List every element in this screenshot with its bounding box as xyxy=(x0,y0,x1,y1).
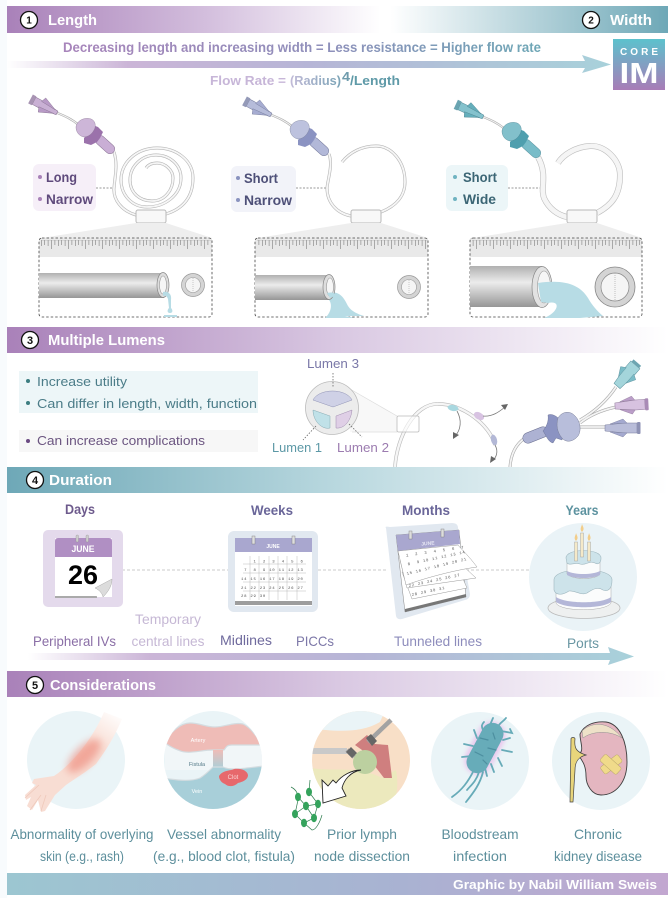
label: months: Months xyxy=(402,502,450,518)
icon: week calendar: JUNE xyxy=(266,544,280,550)
badge 4: 4 xyxy=(32,475,39,487)
caption: bloodstream infection: infection xyxy=(453,848,507,864)
icon: week calendar: 1 2 3 4 5 6 xyxy=(241,560,304,564)
icon: hub and connector xyxy=(241,94,324,151)
curled pages: 22 23 24 25 26 27 xyxy=(409,574,461,589)
icon: clamp xyxy=(136,210,166,223)
curled pages: 8 9 10 11 12 13 14 xyxy=(405,551,466,568)
icon: birthday cake xyxy=(529,523,637,631)
caption: vessel abnormality: (e.g., blood clot, fistula) xyxy=(153,848,295,864)
caption: vessel abnormality xyxy=(153,826,295,864)
label: lumen 1: Lumen 1 xyxy=(272,440,322,455)
flow rate formula: 4 xyxy=(342,69,351,84)
badge 4 xyxy=(26,472,44,488)
badge 3: 3 xyxy=(27,335,33,347)
labels: line types xyxy=(33,611,599,651)
heading: width: Width xyxy=(610,13,652,29)
arrows: lumen exits xyxy=(455,407,505,461)
icon: clamp xyxy=(567,210,597,223)
icon: wide loop tube xyxy=(538,146,620,217)
detail: zoom wedge xyxy=(473,223,642,238)
label: lumen 2: Lumen 2 xyxy=(337,440,389,455)
logo: CORE IM xyxy=(613,39,665,90)
curled pages xyxy=(398,545,477,599)
tiny labels: Clot xyxy=(228,775,239,781)
tiny labels: Artery xyxy=(191,738,206,744)
banner: length and width xyxy=(7,6,668,33)
icon: triple lumen hub xyxy=(510,356,649,467)
icon: hub and connector xyxy=(452,97,536,153)
footer credit xyxy=(7,873,668,895)
caption: lymph node dissection: node dissection xyxy=(314,848,410,864)
detail: zoom wedge xyxy=(258,223,428,238)
flow rate formula: Flow Rate = xyxy=(210,73,286,88)
icon: week calendar: 7 8 9 10 11 12 13 xyxy=(241,569,304,573)
detail: zoom wedge xyxy=(42,223,212,238)
callout: short wide: Short xyxy=(463,169,497,185)
label: years: Years xyxy=(566,502,599,518)
callout: long narrow: Long xyxy=(46,169,77,185)
label: temporary central lines xyxy=(132,611,204,649)
caption: bloodstream infection: Bloodstream xyxy=(442,826,518,842)
label: temporary central lines: central lines xyxy=(132,633,204,649)
icon: day calendar xyxy=(43,530,123,607)
tiny labels xyxy=(189,738,239,795)
panel: benefits of lumens: Can differ in length, width, function xyxy=(37,396,257,411)
callout: short narrow xyxy=(231,166,296,212)
badge 1: 1 xyxy=(26,16,32,26)
cross-section xyxy=(595,267,635,307)
callout: long narrow: Narrow xyxy=(46,191,93,207)
callout: long narrow xyxy=(33,164,96,211)
panel: benefits of lumens: Increase utility xyxy=(37,374,128,389)
caption: skin abnormality: skin (e.g., rash) xyxy=(40,848,124,864)
label: peripheral IVs: Peripheral IVs xyxy=(33,633,116,649)
panel: risks of lumens: Can increase complications xyxy=(37,433,206,448)
badge 3 xyxy=(22,332,38,348)
flow rate formula: /Length xyxy=(350,73,400,88)
label: days: Days xyxy=(65,501,95,517)
logo: CORE IM: IM xyxy=(620,58,658,90)
banner: duration xyxy=(7,467,668,493)
water flow xyxy=(325,292,364,318)
tiny labels: Vein xyxy=(192,789,202,795)
label: weeks: Weeks xyxy=(251,502,293,518)
arrow: duration timeline xyxy=(28,647,634,665)
panel: benefits of lumens xyxy=(19,371,258,413)
icon: week calendar xyxy=(228,531,318,612)
catheter 1: long narrow xyxy=(27,92,212,317)
catheter 2: short narrow xyxy=(231,94,428,318)
label: ports: Ports xyxy=(567,635,599,651)
detail panel: short narrow tube xyxy=(255,238,428,318)
icon: single loop tube xyxy=(327,146,405,216)
callout: short wide xyxy=(446,165,508,211)
heading: multiple lumens: Multiple Lumens xyxy=(48,333,165,349)
icon: lymph node dissection xyxy=(291,711,410,830)
caption: skin abnormality: Abnormality of overlying xyxy=(10,826,154,842)
label: PICCs: PICCs xyxy=(296,633,334,649)
badge 2 xyxy=(582,12,600,28)
icon: month calendar xyxy=(386,523,477,619)
label: temporary central lines: Temporary xyxy=(135,611,201,627)
callout: short narrow: Narrow xyxy=(244,192,292,208)
label: tunneled lines: Tunneled lines xyxy=(394,633,482,649)
label: midlines: Midlines xyxy=(220,632,272,648)
heading: duration: Duration xyxy=(49,473,112,489)
detail panel: long narrow tube xyxy=(39,238,212,317)
caption: skin abnormality xyxy=(10,826,154,864)
catheter 3: short wide xyxy=(446,97,642,318)
icon: day calendar: 26 xyxy=(68,560,98,590)
curled pages: 28 29 30 31 xyxy=(412,587,446,598)
icon: kidney with bandage xyxy=(552,712,650,810)
label: lumen 3: Lumen 3 xyxy=(307,356,359,371)
caption: lymph node dissection: Prior lymph xyxy=(327,826,397,842)
icon: week calendar: 28 29 30 xyxy=(241,595,266,599)
diagram: lumen cross-section xyxy=(272,356,397,455)
icon: clamp xyxy=(351,210,381,223)
icon: white arrow xyxy=(322,770,361,803)
timeline dashed line xyxy=(112,569,532,571)
callout: short wide: Wide xyxy=(463,191,496,207)
icon: coiled tube xyxy=(114,148,193,215)
icon: bacterium xyxy=(431,712,529,810)
banner: considerations xyxy=(7,671,668,697)
caption: chronic kidney disease xyxy=(554,826,642,864)
caption: bloodstream infection xyxy=(442,826,518,864)
water drip xyxy=(163,292,177,317)
panel: risks of lumens xyxy=(19,430,258,452)
caption: vessel abnormality: Vessel abnormality xyxy=(167,826,281,842)
icon: rash on arm xyxy=(25,711,125,812)
heading: length: Length xyxy=(48,13,97,29)
footer credit: Graphic by Nabil William Sweis xyxy=(453,877,657,892)
icon: lavender connector xyxy=(605,419,640,437)
flow rate formula: (Radius) xyxy=(290,73,341,88)
cross-section xyxy=(398,276,420,298)
logo: CORE IM: CORE xyxy=(620,47,658,58)
detail panel: short wide tube xyxy=(470,238,642,318)
icon: month calendar: JUNE xyxy=(421,540,435,548)
icon: green lymph nodes xyxy=(291,780,322,830)
icon: purple connector xyxy=(615,395,649,415)
icon: week calendar: 21 22 23 24 25 26 27 xyxy=(241,587,304,591)
banner: multiple lumens xyxy=(7,327,668,353)
icon: teal connector xyxy=(609,356,645,393)
tiny labels: Fistula xyxy=(189,762,206,768)
badge 5: 5 xyxy=(32,680,38,692)
caption: chronic kidney disease: kidney disease xyxy=(554,848,642,864)
caption: lymph node dissection xyxy=(314,826,410,864)
curled pages: 15 16 17 18 19 20 21 xyxy=(407,558,468,577)
caption: chronic kidney disease: Chronic xyxy=(574,826,622,842)
icon: vessel abnormality xyxy=(163,711,264,812)
icon: week calendar: 14 15 16 17 18 19 20 xyxy=(241,578,304,582)
flow rate formula xyxy=(210,69,400,88)
arrow: gradient top xyxy=(7,55,611,73)
badge 1 xyxy=(20,12,38,28)
icon: day calendar: JUNE xyxy=(72,544,94,554)
callout: short narrow: Short xyxy=(244,170,278,186)
badge 5 xyxy=(26,676,44,694)
headline statement: Decreasing length and increasing width = Less resistance = Higher flow rate xyxy=(63,40,541,55)
cross-section xyxy=(182,274,204,296)
badge 2: 2 xyxy=(588,16,594,26)
icon: distal catheter arch xyxy=(395,404,508,467)
curled pages: 1 2 3 4 5 6 7 xyxy=(403,546,465,559)
heading: considerations: Considerations xyxy=(50,678,156,694)
water flow xyxy=(538,282,603,318)
icon: hub and connector xyxy=(27,92,110,149)
